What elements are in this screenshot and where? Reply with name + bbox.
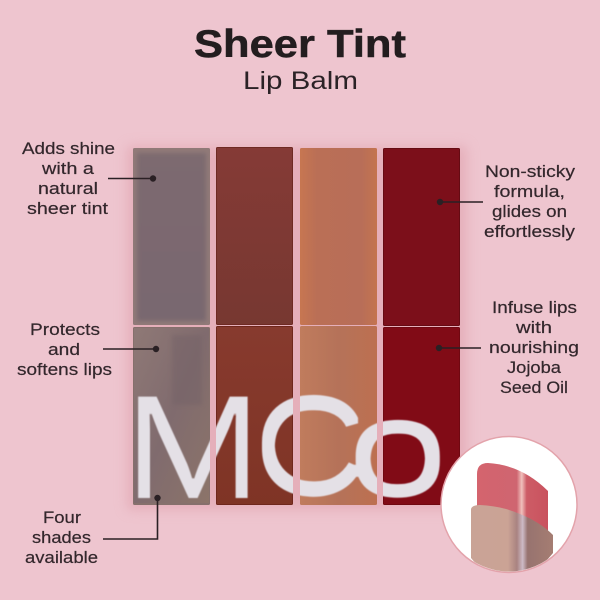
callout: adds shine: Adds shine	[22, 139, 115, 158]
metal tube	[471, 505, 553, 572]
shade 1 mauve	[133, 148, 210, 505]
logo: MCo: o	[347, 373, 448, 522]
callout: non-sticky: effortlessly	[484, 222, 576, 241]
balm bullet	[477, 463, 548, 535]
product: four lip balm shades	[127, 146, 467, 510]
callout: infuse lips: Infuse lips	[492, 298, 577, 317]
callout: four shades: available	[25, 548, 98, 567]
callout: adds shine: natural	[38, 179, 98, 198]
shade 3 peach	[300, 148, 377, 505]
callout: infuse lips: Seed Oil	[500, 378, 568, 397]
callout: adds shine	[22, 139, 156, 218]
callout: infuse lips: with	[515, 318, 552, 337]
callout: non-sticky	[437, 162, 576, 241]
logo: MCo: M	[124, 369, 262, 526]
logo: MCo	[138, 394, 441, 499]
inset: lip balm close-up	[441, 436, 577, 580]
callout: non-sticky: formula,	[494, 182, 565, 201]
shade 2 brick	[216, 147, 293, 505]
callout: adds shine: with a	[41, 159, 95, 178]
callout: non-sticky: Non-sticky	[485, 162, 576, 181]
title: Sheer Tint	[194, 23, 406, 66]
subtitle: Lip Balm	[243, 67, 358, 95]
callout: adds shine: sheer tint	[27, 199, 108, 218]
callout: protects	[17, 320, 159, 379]
callout: infuse lips	[436, 298, 579, 397]
callout: protects: and	[48, 340, 80, 359]
callout: four shades: shades	[32, 528, 91, 547]
callout: four shades	[25, 495, 161, 567]
callout: non-sticky: glides on	[492, 202, 567, 221]
callout: infuse lips: nourishing	[489, 338, 579, 357]
callout: infuse lips: Jojoba	[507, 358, 562, 377]
callout: protects: Protects	[30, 320, 100, 339]
callout: protects: softens lips	[17, 360, 112, 379]
logo: MCo: C	[253, 370, 366, 523]
shade 4 deep red	[383, 148, 460, 505]
callout: four shades: Four	[43, 508, 81, 527]
